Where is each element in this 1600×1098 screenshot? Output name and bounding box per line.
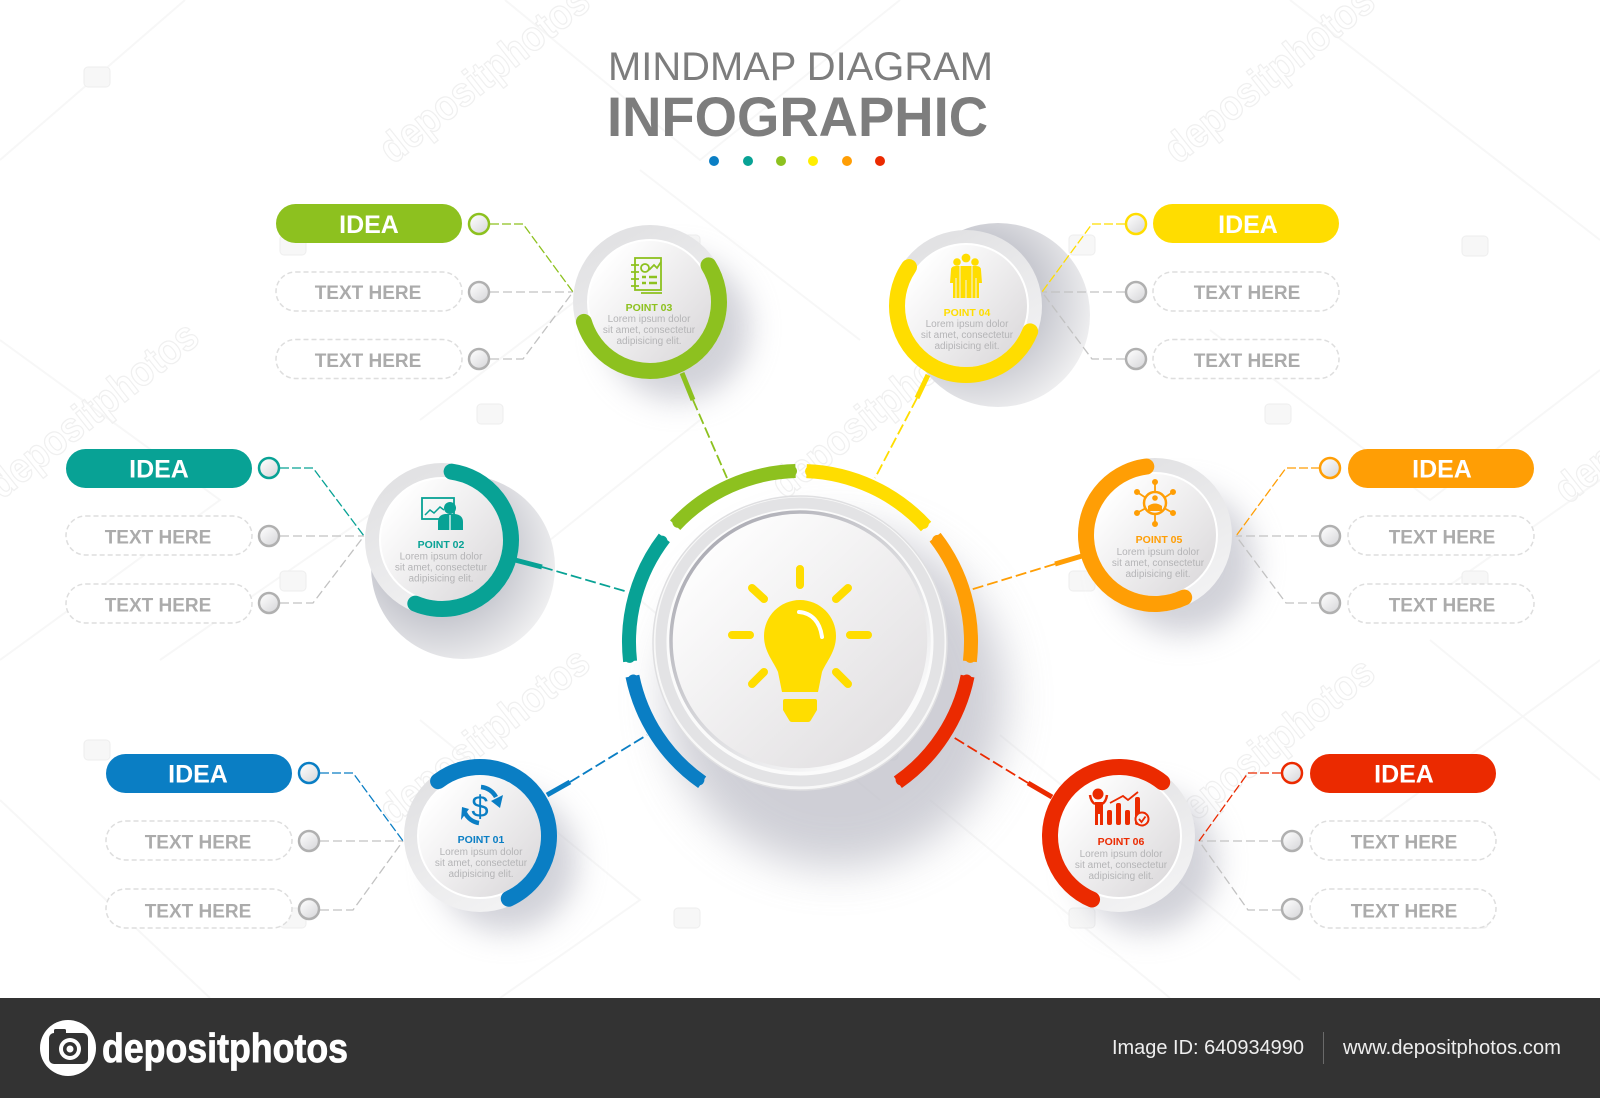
body text: adipisicing elit. [408, 574, 474, 584]
body text: sit amet, consectetur [1112, 558, 1205, 569]
label: POINT 05 [1136, 534, 1182, 546]
text pill: TEXT HERE [1351, 832, 1457, 854]
dot [469, 349, 489, 369]
text pill [66, 584, 252, 623]
icon: camera logo [40, 1020, 96, 1076]
circle shadow [437, 792, 577, 932]
icon: presenter with chart [422, 498, 463, 530]
body text: adipisicing elit. [616, 336, 682, 347]
idea pill [1348, 449, 1534, 488]
label: POINT 02 [418, 539, 464, 551]
dot [299, 831, 319, 851]
icon: person with bar chart [1090, 788, 1148, 826]
body text [603, 314, 696, 347]
circle card [1063, 443, 1247, 627]
dot [1126, 282, 1146, 302]
dot [259, 526, 279, 546]
label: POINT 06 [1098, 836, 1144, 848]
logo text: depositphotos [102, 1025, 348, 1071]
circle card [364, 462, 520, 618]
idea pill [276, 204, 462, 243]
site url: www.depositphotos.com [1342, 1037, 1561, 1059]
circle shadow [1111, 490, 1255, 634]
body text: adipisicing elit. [1125, 569, 1191, 580]
text: depositphotos [1154, 648, 1383, 843]
dot [1126, 214, 1146, 234]
circle shadow [371, 475, 555, 659]
connector lines [1236, 468, 1320, 603]
title [607, 45, 993, 148]
idea pill: IDEA [168, 760, 228, 788]
label: POINT 01 [458, 834, 504, 846]
body text: sit amet, consectetur [921, 330, 1014, 341]
text pill [276, 272, 462, 311]
icon: dollar exchange [461, 787, 503, 824]
dot [469, 282, 489, 302]
label: POINT 03 [626, 302, 672, 314]
panel: point 01 (blue) [106, 739, 577, 933]
icon: notebook [631, 258, 662, 293]
dot [1282, 831, 1302, 851]
panel: point 05 (orange) [1063, 443, 1534, 634]
circle card [555, 207, 745, 397]
body text [921, 319, 1014, 352]
icon: network [1134, 480, 1176, 526]
text pill: TEXT HERE [315, 283, 421, 304]
title: INFOGRAPHIC [607, 85, 988, 148]
text pill: TEXT HERE [105, 596, 211, 616]
circle shadow [906, 223, 1090, 407]
body text: sit amet, consectetur [395, 562, 488, 574]
dot [469, 214, 489, 234]
circle card [876, 216, 1056, 396]
body text: Lorem ipsum dolor [1080, 849, 1163, 860]
dot [1320, 526, 1340, 546]
circle shadow [606, 256, 750, 400]
body text: sit amet, consectetur [1075, 860, 1168, 871]
text pill [1153, 340, 1339, 378]
text pill: TEXT HERE [315, 351, 421, 372]
connector lines [280, 468, 364, 603]
text pill: TEXT HERE [1194, 283, 1300, 304]
text pill [1310, 821, 1496, 860]
panel: point 06 (red) [1029, 746, 1496, 932]
text: depositphotos [761, 312, 990, 507]
text pill [1310, 889, 1496, 928]
body text [1112, 547, 1205, 580]
dot [299, 899, 319, 919]
dot [1126, 349, 1146, 369]
body text: Lorem ipsum dolor [400, 552, 483, 562]
icon: dollar exchange: $ [471, 789, 489, 824]
dot [1320, 593, 1340, 613]
connector lines [1199, 773, 1281, 910]
body text: adipisicing elit. [1088, 871, 1154, 882]
hub shadow [666, 528, 1006, 868]
icon: light bulb [732, 569, 868, 722]
dot [1320, 458, 1340, 478]
body text: sit amet, consectetur [435, 858, 528, 869]
dot [259, 458, 279, 478]
idea pill: IDEA [129, 456, 189, 484]
title: MINDMAP DIAGRAM [608, 45, 993, 89]
text pill [1153, 272, 1339, 311]
body text: Lorem ipsum dolor [926, 319, 1009, 330]
connector lines [1042, 292, 1125, 359]
footer bar [0, 998, 1600, 1098]
idea pill [1153, 204, 1339, 243]
body text: adipisicing elit. [934, 341, 1000, 352]
body text [435, 847, 528, 880]
stems to hub [515, 373, 1082, 797]
circle shadow [1077, 792, 1217, 932]
hub segmented ring [558, 400, 1042, 884]
connector lines [490, 224, 573, 359]
body text: Lorem ipsum dolor [440, 847, 523, 858]
panel: point 02 (teal) [66, 449, 555, 659]
circle card [1029, 746, 1209, 926]
text pill [66, 516, 252, 555]
idea pill [66, 449, 252, 488]
dot [1282, 763, 1302, 783]
central hub [558, 400, 1042, 884]
idea pill: IDEA [339, 211, 399, 239]
image id: Image ID: 640934990 [1112, 1037, 1304, 1059]
dot [1282, 899, 1302, 919]
idea pill: IDEA [1374, 760, 1434, 788]
circle card [383, 739, 577, 933]
body text: sit amet, consectetur [603, 325, 696, 336]
idea pill [1310, 754, 1496, 793]
text pill [276, 340, 462, 378]
text: depositphotos [369, 638, 598, 833]
idea pill [106, 754, 292, 793]
body text: adipisicing elit. [448, 869, 514, 880]
text pill: TEXT HERE [1389, 596, 1495, 616]
icon: people [950, 254, 982, 298]
panel: point 04 (yellow) [876, 204, 1339, 407]
text pill [106, 889, 292, 928]
idea pill: IDEA [1218, 211, 1278, 239]
label: POINT 04 [944, 307, 990, 319]
hub disc [653, 496, 947, 790]
text pill [106, 821, 292, 860]
dot [259, 593, 279, 613]
text pill: TEXT HERE [105, 528, 211, 548]
connector line: idea [1042, 224, 1125, 292]
text pill: TEXT HERE [1351, 902, 1457, 922]
text pill: TEXT HERE [1389, 528, 1495, 548]
text pill [1348, 584, 1534, 623]
dot [299, 763, 319, 783]
idea pill: IDEA [1412, 456, 1472, 484]
text pill [1348, 516, 1534, 555]
body text [1075, 849, 1168, 882]
text pill: TEXT HERE [1194, 351, 1300, 372]
body text: Lorem ipsum dolor [1117, 547, 1200, 558]
panel: point 03 (green) [276, 204, 750, 400]
colour dots [709, 156, 885, 166]
text pill: TEXT HERE [145, 832, 251, 854]
body text: Lorem ipsum dolor [608, 314, 691, 325]
text pill: TEXT HERE [145, 902, 251, 922]
body text [395, 552, 488, 584]
connector lines [320, 773, 403, 910]
